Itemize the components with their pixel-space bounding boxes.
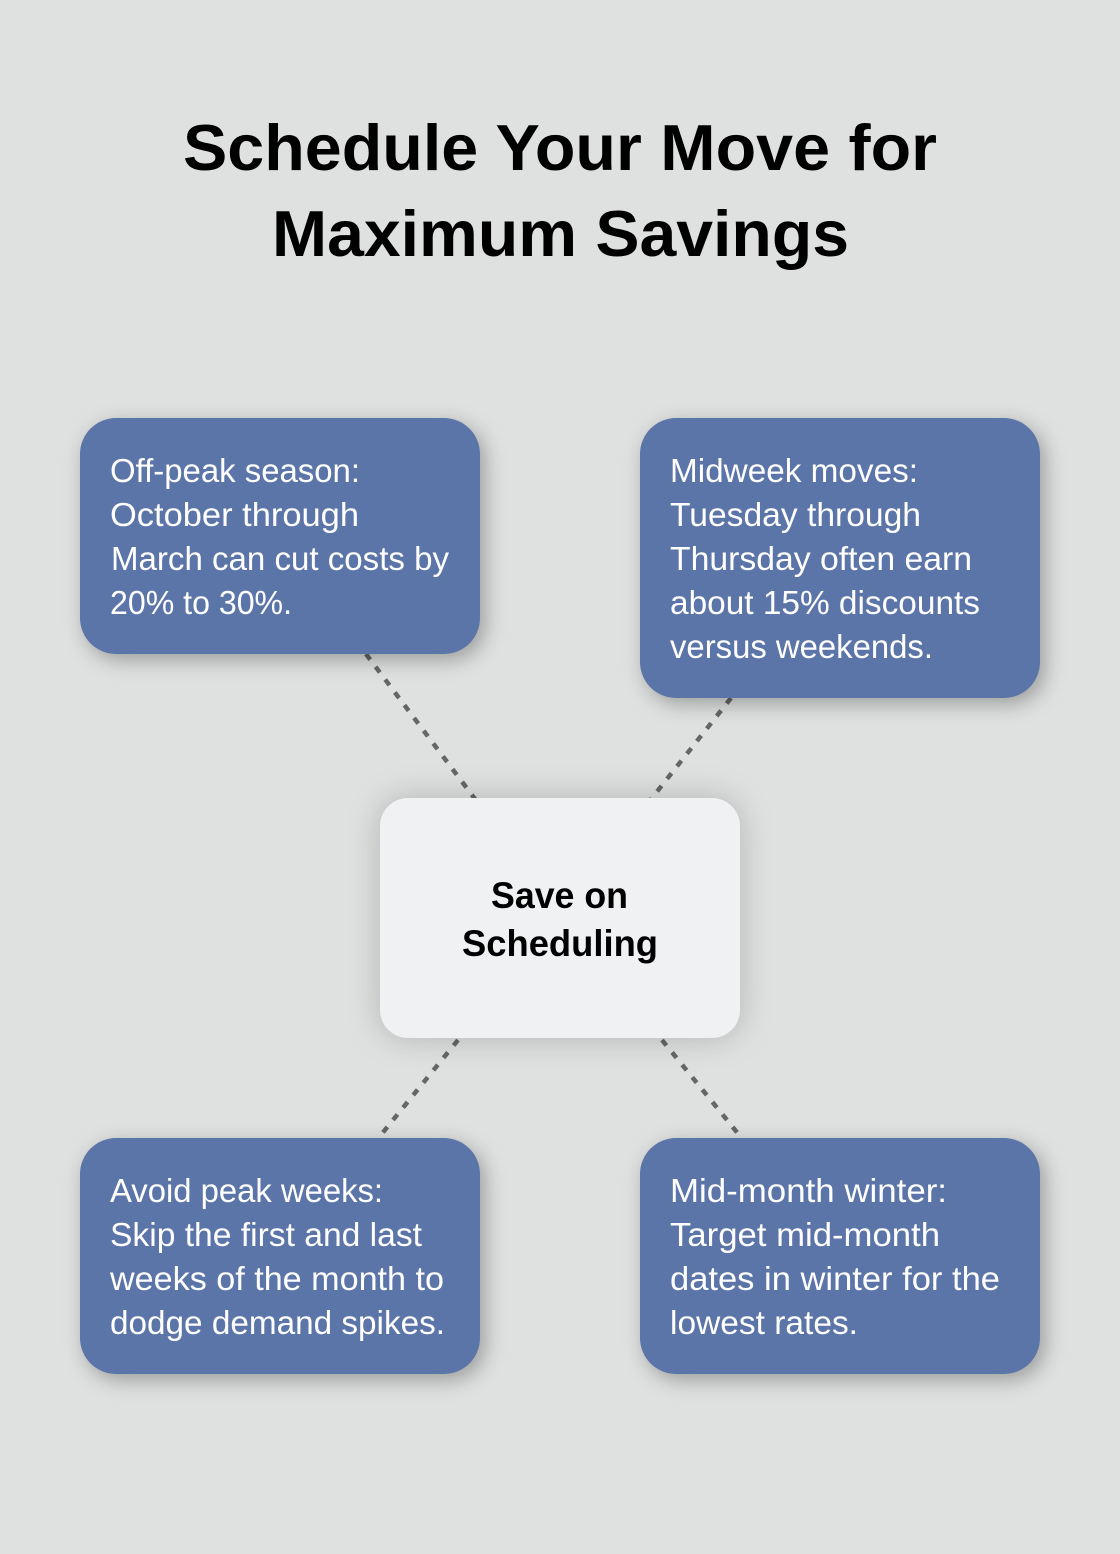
panel: off-peak season: March can cut costs by [111, 540, 449, 577]
panel: off-peak season: 20% to 30%. [110, 584, 292, 621]
panel: midweek moves: about 15% discounts [670, 584, 980, 621]
panel: mid-month winter: dates in winter for the [670, 1260, 1000, 1297]
panel: center topic: Save on [491, 875, 628, 916]
panel: off-peak season [80, 418, 480, 654]
panel: avoid peak weeks: Avoid peak weeks: [110, 1172, 383, 1209]
panel: center topic: Scheduling [462, 923, 658, 964]
panel: mid-month winter [640, 1138, 1040, 1374]
panel: mid-month winter: Target mid-month [670, 1216, 940, 1253]
panel: avoid peak weeks: Skip the first and last [110, 1216, 422, 1253]
panel: midweek moves [640, 418, 1040, 698]
panel: mid-month winter: Mid-month winter: [670, 1172, 947, 1209]
panel: midweek moves: Midweek moves: [670, 452, 918, 489]
connector: mid-month winter to center [662, 1040, 740, 1136]
panel: midweek moves: versus weekends. [670, 628, 933, 665]
connector: avoid peak weeks to center [380, 1040, 458, 1136]
panel: off-peak season: Off-peak season: [110, 452, 360, 489]
panel: midweek moves: Thursday often earn [670, 540, 972, 577]
title: Schedule Your Move for [183, 111, 937, 184]
panel: mid-month winter: lowest rates. [670, 1304, 858, 1341]
connector: off-peak season to center [366, 654, 478, 803]
title: Maximum Savings [272, 197, 849, 270]
panel: avoid peak weeks [80, 1138, 480, 1374]
title [183, 111, 937, 270]
panel: center topic [380, 798, 740, 1038]
panel: midweek moves: Tuesday through [670, 496, 921, 533]
panel: off-peak season: October through [110, 496, 359, 533]
panel: avoid peak weeks: dodge demand spikes. [110, 1304, 445, 1341]
panel: avoid peak weeks: weeks of the month to [109, 1260, 444, 1297]
connector: midweek moves to center [648, 698, 731, 803]
